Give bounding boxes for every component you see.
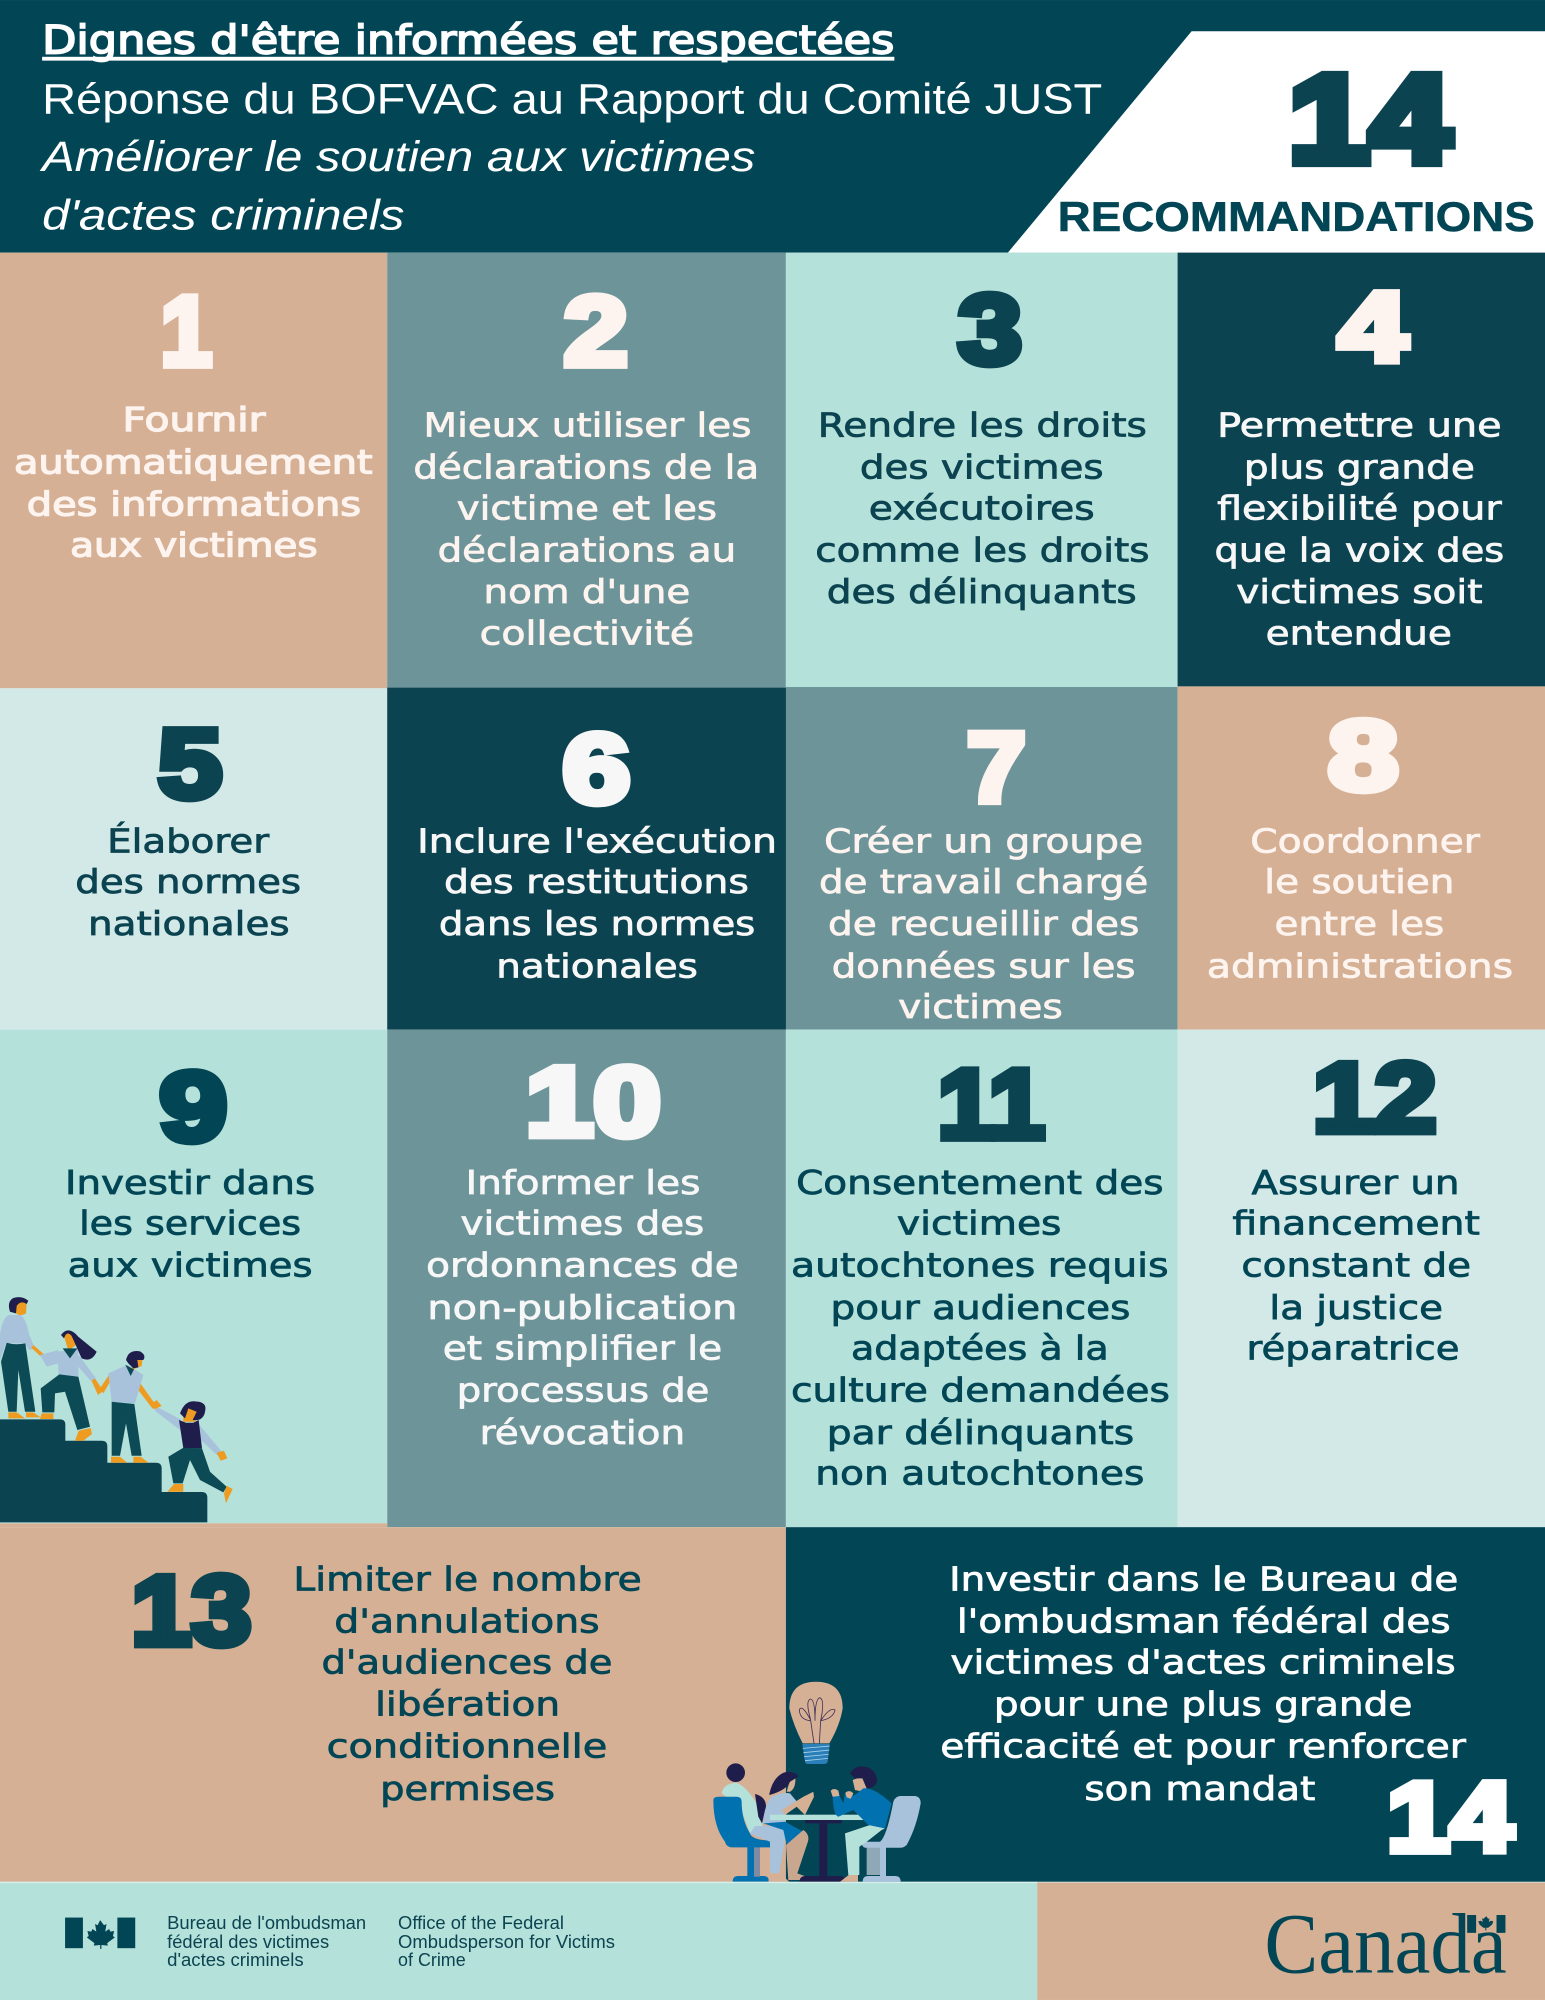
- panel: recommendation 12: financement: [1232, 1204, 1480, 1243]
- panel: recommendation 7: de recueillir des: [828, 904, 1139, 943]
- panel: recommendation 12: constant de: [1241, 1246, 1471, 1285]
- panel: recommendation 5: nationales: [88, 904, 290, 943]
- panel: recommendation 14: l'ombudsman fédéral des: [957, 1602, 1451, 1641]
- panel: recommendation 6: Inclure l'exécution: [417, 821, 777, 860]
- text: French department name: Bureau de l'ombudsman: [167, 1912, 366, 1933]
- panel: recommendation 8: le soutien: [1264, 862, 1454, 901]
- panel: recommendation 10: non-publication: [427, 1288, 737, 1327]
- panel: recommendation 7: Créer un groupe: [824, 821, 1143, 860]
- panel: recommendation 11: 11: [938, 1049, 1045, 1159]
- panel: recommendation 11: [786, 1030, 1178, 1527]
- panel: recommendation 2: [387, 253, 786, 688]
- panel: recommendation 4: [1178, 253, 1545, 686]
- panel: recommendation 14: son mandat: [1084, 1769, 1315, 1808]
- panel: recommendation 3: 3: [958, 275, 1022, 385]
- illustration: people helping each other up stairs: [0, 1297, 233, 1522]
- panel: recommendation 13: libération: [375, 1685, 560, 1724]
- panel: recommendation 8: Coordonner: [1250, 821, 1480, 860]
- panel: recommendation 14: [786, 1527, 1545, 1882]
- panel: recommendation 8: [1178, 686, 1545, 1030]
- panel: recommendation 4: entendue: [1266, 613, 1452, 652]
- panel: recommendation 2: déclarations au: [438, 530, 736, 569]
- panel: recommendation 14: pour une plus grande: [994, 1685, 1412, 1724]
- panel: recommendation 14: victimes d'actes criminels: [950, 1642, 1456, 1681]
- panel: recommendation 10: révocation: [480, 1413, 685, 1452]
- icon: Canadian flag: [65, 1918, 135, 1949]
- panel: recommendation 14: Investir dans le Bureau de: [949, 1560, 1458, 1599]
- logo: Canada wordmark: Canada: [1264, 1897, 1507, 1991]
- panel: recommendation 4: flexibilité pour: [1217, 488, 1502, 527]
- italic subtitle: d'actes criminels: [42, 192, 404, 240]
- panel: recommendation 13: Limiter le nombre: [293, 1560, 642, 1599]
- panel: recommendation 5: 5: [158, 708, 222, 818]
- panel: recommendation 9: les services: [79, 1204, 301, 1243]
- panel: recommendation 10: processus de: [457, 1371, 709, 1410]
- panel: recommendation 14: 14: [1387, 1762, 1514, 1872]
- panel: recommendation 12: la justice: [1269, 1288, 1443, 1327]
- panel: recommendation 10: et simplifier le: [443, 1329, 722, 1368]
- panel: recommendation 7: 7: [967, 712, 1026, 822]
- panel: recommendation 2: nom d'une: [484, 572, 690, 611]
- panel: recommendation 13: conditionnelle: [327, 1727, 607, 1766]
- text: English department name: [398, 1912, 615, 1970]
- panel: recommendation 8: administrations: [1207, 946, 1513, 985]
- panel: recommendation 12: réparatrice: [1246, 1329, 1460, 1368]
- text: French department name: [167, 1912, 366, 1970]
- panel: recommendation 2: Mieux utiliser les: [424, 405, 751, 444]
- panel: recommendation 3: des délinquants: [827, 572, 1137, 611]
- panel: recommendation 3: Rendre les droits: [818, 405, 1147, 444]
- panel: recommendation 9: [0, 1030, 387, 1523]
- panel: recommendation 4: 4: [1338, 272, 1408, 382]
- panel: recommendation 3: exécutoires: [869, 488, 1095, 527]
- panel: recommendation 10: [387, 1030, 786, 1527]
- panel: recommendation 1: automatiquement: [14, 442, 373, 481]
- panel: recommendation 7: données sur les: [832, 946, 1135, 985]
- text: English department name: Office of the Federal: [398, 1912, 564, 1933]
- panel: recommendation 6: nationales: [496, 946, 698, 985]
- panel: recommendation 5: des normes: [75, 862, 301, 901]
- panel: recommendation 2: déclarations de la: [413, 447, 759, 486]
- callout: 14 recommandations: [1008, 31, 1545, 253]
- panel: recommendation 8: entre les: [1275, 904, 1444, 943]
- panel: recommendation 10: Informer les: [466, 1163, 700, 1202]
- panel: recommendation 2: collectivité: [480, 613, 694, 652]
- illustration: people at a table under a light bulb: [713, 1682, 921, 1882]
- panel: recommendation 12: Assurer un: [1252, 1163, 1460, 1202]
- panel: recommendation 11: victimes: [897, 1204, 1061, 1243]
- panel: recommendation 12: 12: [1313, 1043, 1437, 1153]
- panel: recommendation 3: des victimes: [860, 447, 1104, 486]
- panel: recommendation 13: [0, 1523, 786, 1882]
- table: [770, 1815, 867, 1882]
- panel: recommendation 9: aux victimes: [68, 1246, 313, 1285]
- panel: recommendation 13: d'audiences de: [322, 1642, 612, 1681]
- panel: recommendation 2: 2: [564, 276, 628, 386]
- panel: recommendation 4: victimes soit: [1236, 572, 1482, 611]
- panel: recommendation 6: dans les normes: [439, 904, 755, 943]
- panel: recommendation 12: [1178, 1030, 1545, 1527]
- italic subtitle: Améliorer le soutien aux victimes: [39, 133, 755, 181]
- panel: recommendation 1: Fournir: [122, 400, 266, 439]
- panel: recommendation 11: adaptées à la: [851, 1329, 1109, 1368]
- panel: recommendation 13: 13: [131, 1556, 251, 1666]
- panel: recommendation 11: Consentement des: [796, 1163, 1164, 1202]
- panel: recommendation 9: Investir dans: [65, 1163, 315, 1202]
- panel: recommendation 6: des restitutions: [444, 862, 749, 901]
- header banner: [0, 0, 1545, 253]
- footer: Canadian federal identity: [0, 1882, 1545, 2000]
- panel: recommendation 3: comme les droits: [815, 530, 1150, 569]
- panel: recommendation 13: d'annulations: [334, 1602, 600, 1641]
- panel: recommendation 5: Élaborer: [107, 820, 270, 860]
- panel: recommendation 3: [786, 253, 1178, 688]
- panel: recommendation 10: ordonnances de: [426, 1246, 739, 1285]
- panel: recommendation 11: culture demandées: [791, 1371, 1170, 1410]
- panel: recommendation 11: non autochtones: [815, 1454, 1144, 1493]
- panel: recommendation 1: 1: [161, 276, 212, 386]
- text: French department name: d'actes criminels: [167, 1949, 304, 1970]
- callout: 14 recommandations: 14: [1289, 50, 1451, 189]
- panel: recommendation 1: des informations: [27, 484, 361, 523]
- panel: recommendation 6: 6: [563, 714, 630, 824]
- icon: light bulb: [789, 1682, 843, 1764]
- panel: recommendation 10: 10: [526, 1046, 661, 1156]
- text: French department name: fédéral des victimes: [167, 1931, 329, 1952]
- panel: recommendation 7: [786, 687, 1178, 1030]
- panel: recommendation 11: par délinquants: [827, 1413, 1134, 1452]
- panel: recommendation 14: efficacité et pour renforcer: [940, 1727, 1466, 1766]
- callout: 14 recommandations: RECOMMANDATIONS: [1058, 193, 1535, 240]
- panel: recommendation 4: Permettre une: [1217, 405, 1502, 444]
- panel: recommendation 7: de travail chargé: [819, 862, 1148, 901]
- panel: recommendation 1: aux victimes: [70, 525, 318, 564]
- panel: recommendation 5: [0, 688, 387, 1030]
- panel: recommendation 1: [0, 253, 387, 688]
- title: Dignes d'être informées et respectées: [42, 18, 894, 64]
- panel: recommendation 8: 8: [1328, 701, 1398, 811]
- panel: recommendation 11: autochtones requis: [791, 1246, 1169, 1285]
- panel: recommendation 11: pour audiences: [831, 1288, 1130, 1327]
- italic subtitle: [39, 133, 755, 240]
- text: English department name: of Crime: [398, 1949, 466, 1970]
- text: English department name: Ombudsperson for Victims: [398, 1931, 615, 1952]
- panel: recommendation 6: [387, 688, 787, 1030]
- panel: recommendation 9: 9: [159, 1052, 227, 1162]
- panel: recommendation 4: que la voix des: [1215, 530, 1504, 569]
- panel: recommendation 2: victime et les: [457, 488, 717, 527]
- panel: recommendation 7: victimes: [898, 987, 1063, 1026]
- panel: recommendation 4: plus grande: [1244, 447, 1475, 486]
- panel: recommendation 13: permises: [380, 1769, 555, 1808]
- subtitle: Réponse du BOFVAC au Rapport du Comité JUST: [42, 76, 1102, 124]
- panel: recommendation 10: victimes des: [461, 1204, 704, 1243]
